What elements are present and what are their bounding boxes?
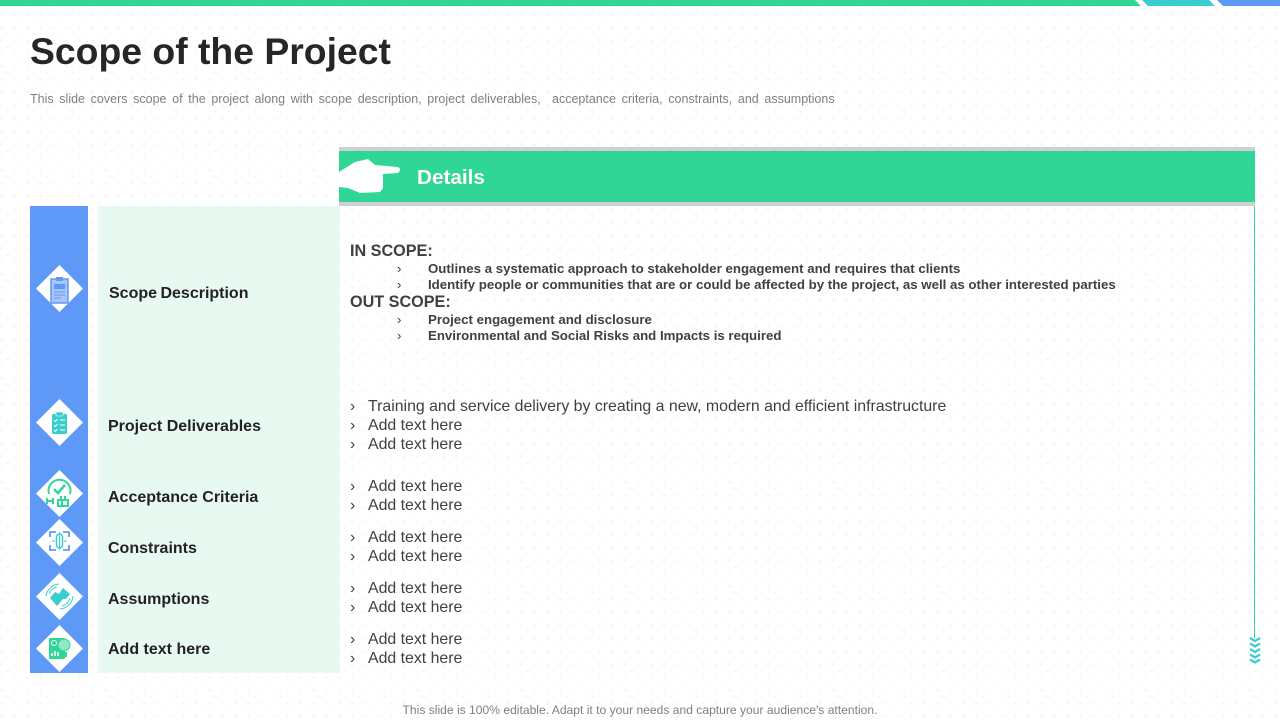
- text block: project deliverables: ›: [350, 417, 355, 434]
- in scope heading: IN SCOPE:: [350, 242, 433, 260]
- text block: project deliverables: Add text here: [368, 436, 462, 453]
- icon: assumptions: [36, 573, 83, 620]
- icon: pointing hand: [339, 159, 400, 193]
- out scope heading: OUT SCOPE:: [350, 293, 451, 311]
- text block: constraints: ›: [350, 529, 355, 546]
- icon: project deliverables: [36, 399, 83, 446]
- text block: acceptance criteria: ›: [350, 478, 355, 495]
- out scope bullets: ›: [397, 312, 401, 327]
- out scope bullets: [397, 312, 781, 343]
- label: project deliverables: Project Deliverables: [108, 418, 261, 435]
- text block: project deliverables: Training and service delivery by creating a new, modern and efficient infrastructure: [368, 398, 946, 415]
- text block: add text here: [350, 631, 462, 667]
- text block: assumptions: Add text here: [368, 599, 462, 616]
- label: assumptions: Assumptions: [108, 591, 209, 608]
- icon: constraints: [36, 519, 83, 566]
- in scope bullets: ›: [397, 261, 401, 276]
- icon: acceptance criteria: [36, 470, 83, 517]
- title: Scope of the Project: [30, 30, 391, 72]
- in scope bullets: Outlines a systematic approach to stakeholder engagement and requires that clients: [428, 261, 960, 276]
- icon: add text: [36, 625, 83, 672]
- text block: add text here: Add text here: [368, 650, 462, 667]
- label: add text here: Add text here: [108, 641, 210, 658]
- text block: assumptions: ›: [350, 580, 355, 597]
- text block: acceptance criteria: Add text here: [368, 497, 462, 514]
- out scope bullets: Project engagement and disclosure: [428, 312, 652, 327]
- panel: details header: [339, 147, 1255, 206]
- text block: acceptance criteria: Add text here: [368, 478, 462, 495]
- footer note: This slide is 100% editable. Adapt it to your needs and capture your audience's attention.: [403, 703, 877, 717]
- out scope bullets: ›: [397, 328, 401, 343]
- panel: blue icon column: [30, 206, 88, 673]
- text block: assumptions: ›: [350, 599, 355, 616]
- right border line: [1254, 206, 1255, 638]
- label: scope description: Scope Description: [109, 285, 248, 302]
- icon: scope description: [36, 265, 83, 312]
- text block: acceptance criteria: ›: [350, 497, 355, 514]
- text block: project deliverables: ›: [350, 436, 355, 453]
- text block: project deliverables: [350, 398, 946, 453]
- panel: label column: [98, 206, 340, 673]
- header band: [339, 147, 1255, 206]
- text block: add text here: ›: [350, 631, 355, 648]
- text block: scope description: [350, 242, 1116, 343]
- text block: acceptance criteria: [350, 478, 462, 514]
- text block: assumptions: [350, 580, 462, 616]
- subtitle: This slide covers scope of the project along with scope description, project deliverables, acceptance criteria, constraints, and assumptions: [30, 92, 835, 106]
- icon: chevrons: [1250, 637, 1260, 664]
- text block: add text here: Add text here: [368, 631, 462, 648]
- top accent bar: [0, 0, 1280, 6]
- row labels: [108, 285, 261, 658]
- label: acceptance criteria: Acceptance Criteria: [108, 489, 258, 506]
- in scope bullets: ›: [397, 277, 401, 292]
- text block: project deliverables: Add text here: [368, 417, 462, 434]
- text block: constraints: Add text here: [368, 548, 462, 565]
- in scope bullets: Identify people or communities that are or could be affected by the project, as well as other interested parties: [428, 277, 1116, 292]
- text block: assumptions: Add text here: [368, 580, 462, 597]
- in scope bullets: [397, 261, 1116, 292]
- text block: add text here: ›: [350, 650, 355, 667]
- label: constraints: Constraints: [108, 540, 197, 557]
- text block: project deliverables: ›: [350, 398, 355, 415]
- text block: constraints: [350, 529, 462, 565]
- text block: constraints: Add text here: [368, 529, 462, 546]
- header label: Details: [417, 166, 485, 189]
- text block: constraints: ›: [350, 548, 355, 565]
- out scope bullets: Environmental and Social Risks and Impacts is required: [428, 328, 781, 343]
